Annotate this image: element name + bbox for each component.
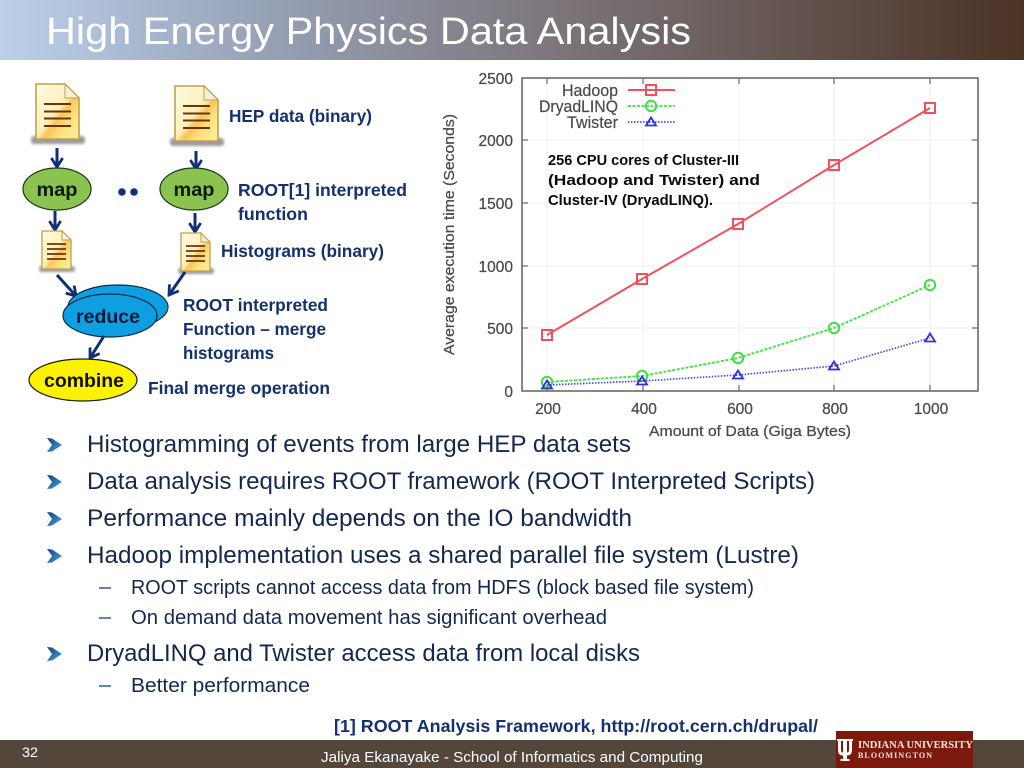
reduce node: reduce bbox=[76, 307, 140, 328]
chart annotation: 256 CPU cores of Cluster-III bbox=[548, 152, 739, 169]
bullet: histogramming: Histogramming of events from large HEP data sets bbox=[87, 431, 631, 458]
x axis tick labels: 400 bbox=[631, 401, 657, 418]
header bar bbox=[0, 0, 1024, 60]
page number: 32 bbox=[22, 744, 38, 760]
bullet: ROOT framework: Data analysis requires ROOT framework (ROOT Interpreted Scripts) bbox=[87, 468, 815, 495]
chart legend: Twister bbox=[567, 114, 618, 132]
arrow: map to histogram left bbox=[54, 211, 56, 230]
y axis tick labels: 2500 bbox=[479, 71, 513, 88]
map node right bbox=[160, 168, 228, 210]
map node right: map bbox=[174, 180, 214, 201]
bullet: DryadLINQ and Twister: DryadLINQ and Twister access data from local disks bbox=[87, 640, 640, 667]
x axis tick labels: 1000 bbox=[914, 401, 949, 418]
arrow: reduce to combine bbox=[90, 336, 104, 358]
chart annotation: Cluster-IV (DryadLINQ). bbox=[548, 192, 713, 209]
footer bar bbox=[0, 740, 1024, 768]
diagram labels bbox=[148, 106, 407, 398]
arrow: histogram right to reduce bbox=[169, 272, 185, 295]
label: merge histograms: ROOT interpreted bbox=[183, 295, 328, 315]
series: DryadLINQ bbox=[542, 280, 935, 387]
arrow: document to map left bbox=[56, 148, 58, 167]
y axis tick labels: 500 bbox=[487, 321, 513, 338]
icon: histogram document left bbox=[39, 231, 75, 272]
sub-bullet: HDFS: ROOT scripts cannot access data from HDFS (block based file system) bbox=[131, 577, 754, 599]
y axis tick labels: 2000 bbox=[479, 133, 513, 150]
icon: IU trident bbox=[837, 739, 853, 761]
footer text: Jaliya Ekanayake - School of Informatics and Computing bbox=[321, 749, 703, 766]
chart axes bbox=[522, 78, 978, 391]
arrow: document to map right bbox=[194, 151, 198, 169]
series: Hadoop bbox=[542, 103, 935, 340]
series: Twister bbox=[542, 334, 935, 388]
line chart bbox=[441, 71, 978, 440]
x axis tick labels: 200 bbox=[535, 401, 561, 418]
arrow: map to histogram right bbox=[194, 213, 196, 232]
bullet list bbox=[47, 431, 815, 697]
y axis tick labels: 0 bbox=[504, 384, 513, 401]
chart grid bbox=[522, 78, 978, 391]
logo: Indiana University bbox=[836, 731, 973, 768]
label: merge histograms: histograms bbox=[183, 343, 274, 363]
logo text: INDIANA UNIVERSITY bbox=[858, 739, 973, 751]
reduce node bbox=[63, 285, 168, 337]
label: Histograms: Histograms (binary) bbox=[221, 241, 384, 261]
title: High Energy Physics Data Analysis bbox=[46, 11, 691, 53]
map node left: map bbox=[36, 180, 78, 201]
y axis tick labels: 1000 bbox=[479, 259, 513, 276]
sub-bullet: overhead: On demand data movement has significant overhead bbox=[131, 607, 607, 629]
sub-bullet: better performance: Better performance bbox=[131, 675, 310, 697]
label: ROOT interpreted function: ROOT[1] interpreted bbox=[238, 180, 407, 200]
bullet: Hadoop implementation: Hadoop implementation uses a shared parallel file system (Lustre) bbox=[87, 542, 799, 569]
label: ROOT interpreted function: function bbox=[238, 204, 308, 224]
bullet: performance: Performance mainly depends on the IO bandwidth bbox=[87, 505, 632, 532]
workflow diagram bbox=[23, 84, 228, 401]
x axis tick labels: 800 bbox=[822, 401, 848, 418]
arrow: histogram left to reduce bbox=[57, 275, 76, 296]
chart legend: DryadLINQ bbox=[539, 98, 618, 116]
icon: input document right bbox=[170, 86, 224, 146]
logo: Indiana University: BLOOMINGTON bbox=[858, 751, 932, 760]
y axis tick labels bbox=[479, 71, 513, 401]
x axis title: Amount of Data (Giga Bytes) bbox=[649, 423, 851, 440]
combine node: combine bbox=[44, 371, 124, 392]
chart legend: Hadoop bbox=[562, 82, 618, 100]
combine node bbox=[29, 359, 137, 401]
map node left bbox=[23, 168, 91, 210]
label: HEP data: HEP data (binary) bbox=[229, 106, 372, 126]
icon: input document left bbox=[31, 84, 85, 144]
ellipsis dots bbox=[118, 188, 138, 196]
chart annotation: (Hadoop and Twister) and bbox=[548, 172, 760, 189]
y axis tick labels: 1500 bbox=[479, 196, 513, 213]
x axis tick labels bbox=[535, 401, 949, 418]
x axis tick labels: 600 bbox=[727, 401, 753, 418]
icon: histogram document right bbox=[178, 233, 214, 274]
y axis title: Average execution time (Seconds) bbox=[441, 114, 458, 355]
label: merge histograms: Function – merge bbox=[183, 319, 326, 339]
chart legend bbox=[539, 82, 675, 132]
reference note: [1] ROOT Analysis Framework, http://root.cern.ch/drupal/ bbox=[334, 716, 818, 736]
label: final merge: Final merge operation bbox=[148, 378, 330, 398]
